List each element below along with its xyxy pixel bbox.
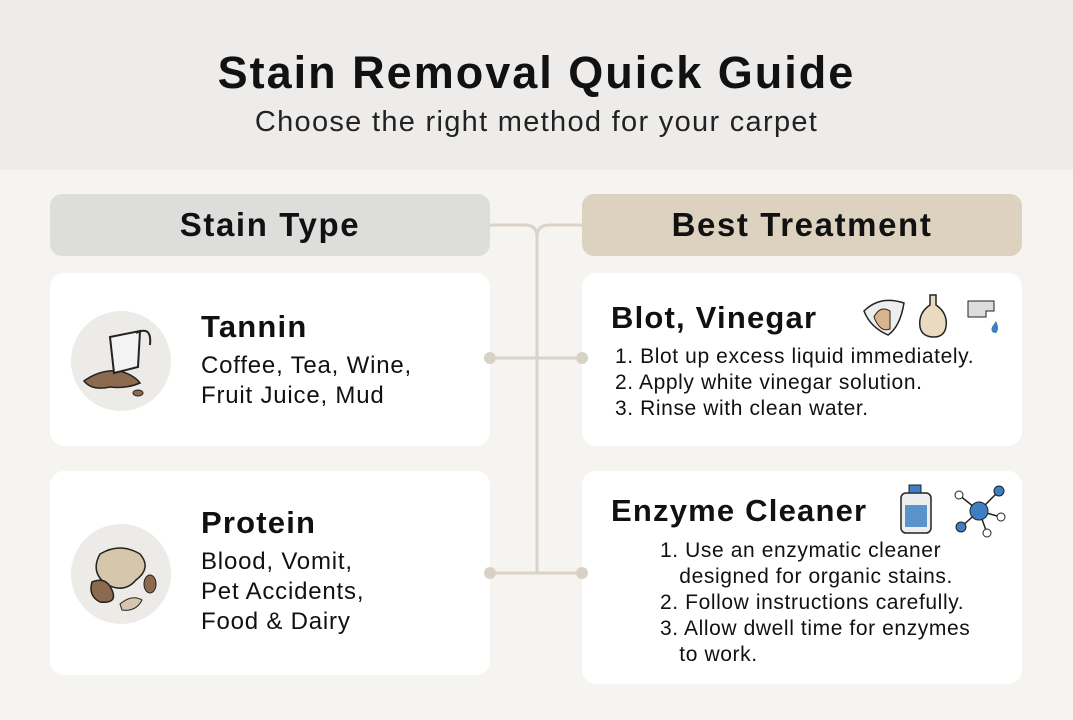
steps: blot vinegar: 1. Blot up excess liquid immediately. — [615, 345, 974, 368]
steps: enzyme — [660, 539, 970, 666]
heading: best treatment: Best Treatment — [672, 206, 932, 243]
text: protein: Blood, Vomit, — [201, 548, 353, 575]
title: Stain Removal Quick Guide — [218, 47, 855, 98]
subtitle: Choose the right method for your carpet — [255, 106, 818, 138]
steps: enzyme: 3. Allow dwell time for enzymes — [660, 617, 970, 640]
steps: blot vinegar: 3. Rinse with clean water. — [615, 397, 869, 420]
heading: stain type: Stain Type — [180, 206, 360, 243]
heading: blot vinegar: Blot, Vinegar — [611, 300, 817, 335]
icon: protein stain — [71, 524, 171, 624]
steps: blot vinegar — [615, 345, 974, 420]
panel: enzyme cleaner — [582, 471, 1022, 684]
panel: tannin — [50, 273, 490, 446]
icon: spilled cup — [71, 311, 171, 411]
text: protein — [201, 505, 364, 635]
panel: blot vinegar — [582, 273, 1022, 446]
text: tannin: Tannin — [201, 309, 308, 344]
steps: blot vinegar: 2. Apply white vinegar solution. — [615, 371, 923, 394]
steps: enzyme: designed for organic stains. — [679, 565, 953, 588]
steps: enzyme: 2. Follow instructions carefully. — [660, 591, 964, 614]
text: tannin: Fruit Juice, Mud — [201, 382, 385, 409]
icons: bottle, molecule — [900, 484, 1006, 538]
text: protein: Protein — [201, 505, 316, 540]
panel: protein — [50, 471, 490, 675]
steps: enzyme: 1. Use an enzymatic cleaner — [660, 539, 941, 562]
steps: enzyme: to work. — [679, 643, 758, 666]
icons: cloth, vinegar, tap — [863, 294, 998, 338]
header band — [0, 0, 1073, 170]
text: protein: Pet Accidents, — [201, 578, 364, 605]
text: tannin: Coffee, Tea, Wine, — [201, 352, 412, 379]
heading: stain type — [50, 194, 490, 256]
text: tannin — [201, 309, 412, 409]
heading: best treatment — [582, 194, 1022, 256]
text: protein: Food & Dairy — [201, 608, 351, 635]
heading: enzyme cleaner: Enzyme Cleaner — [611, 493, 867, 528]
